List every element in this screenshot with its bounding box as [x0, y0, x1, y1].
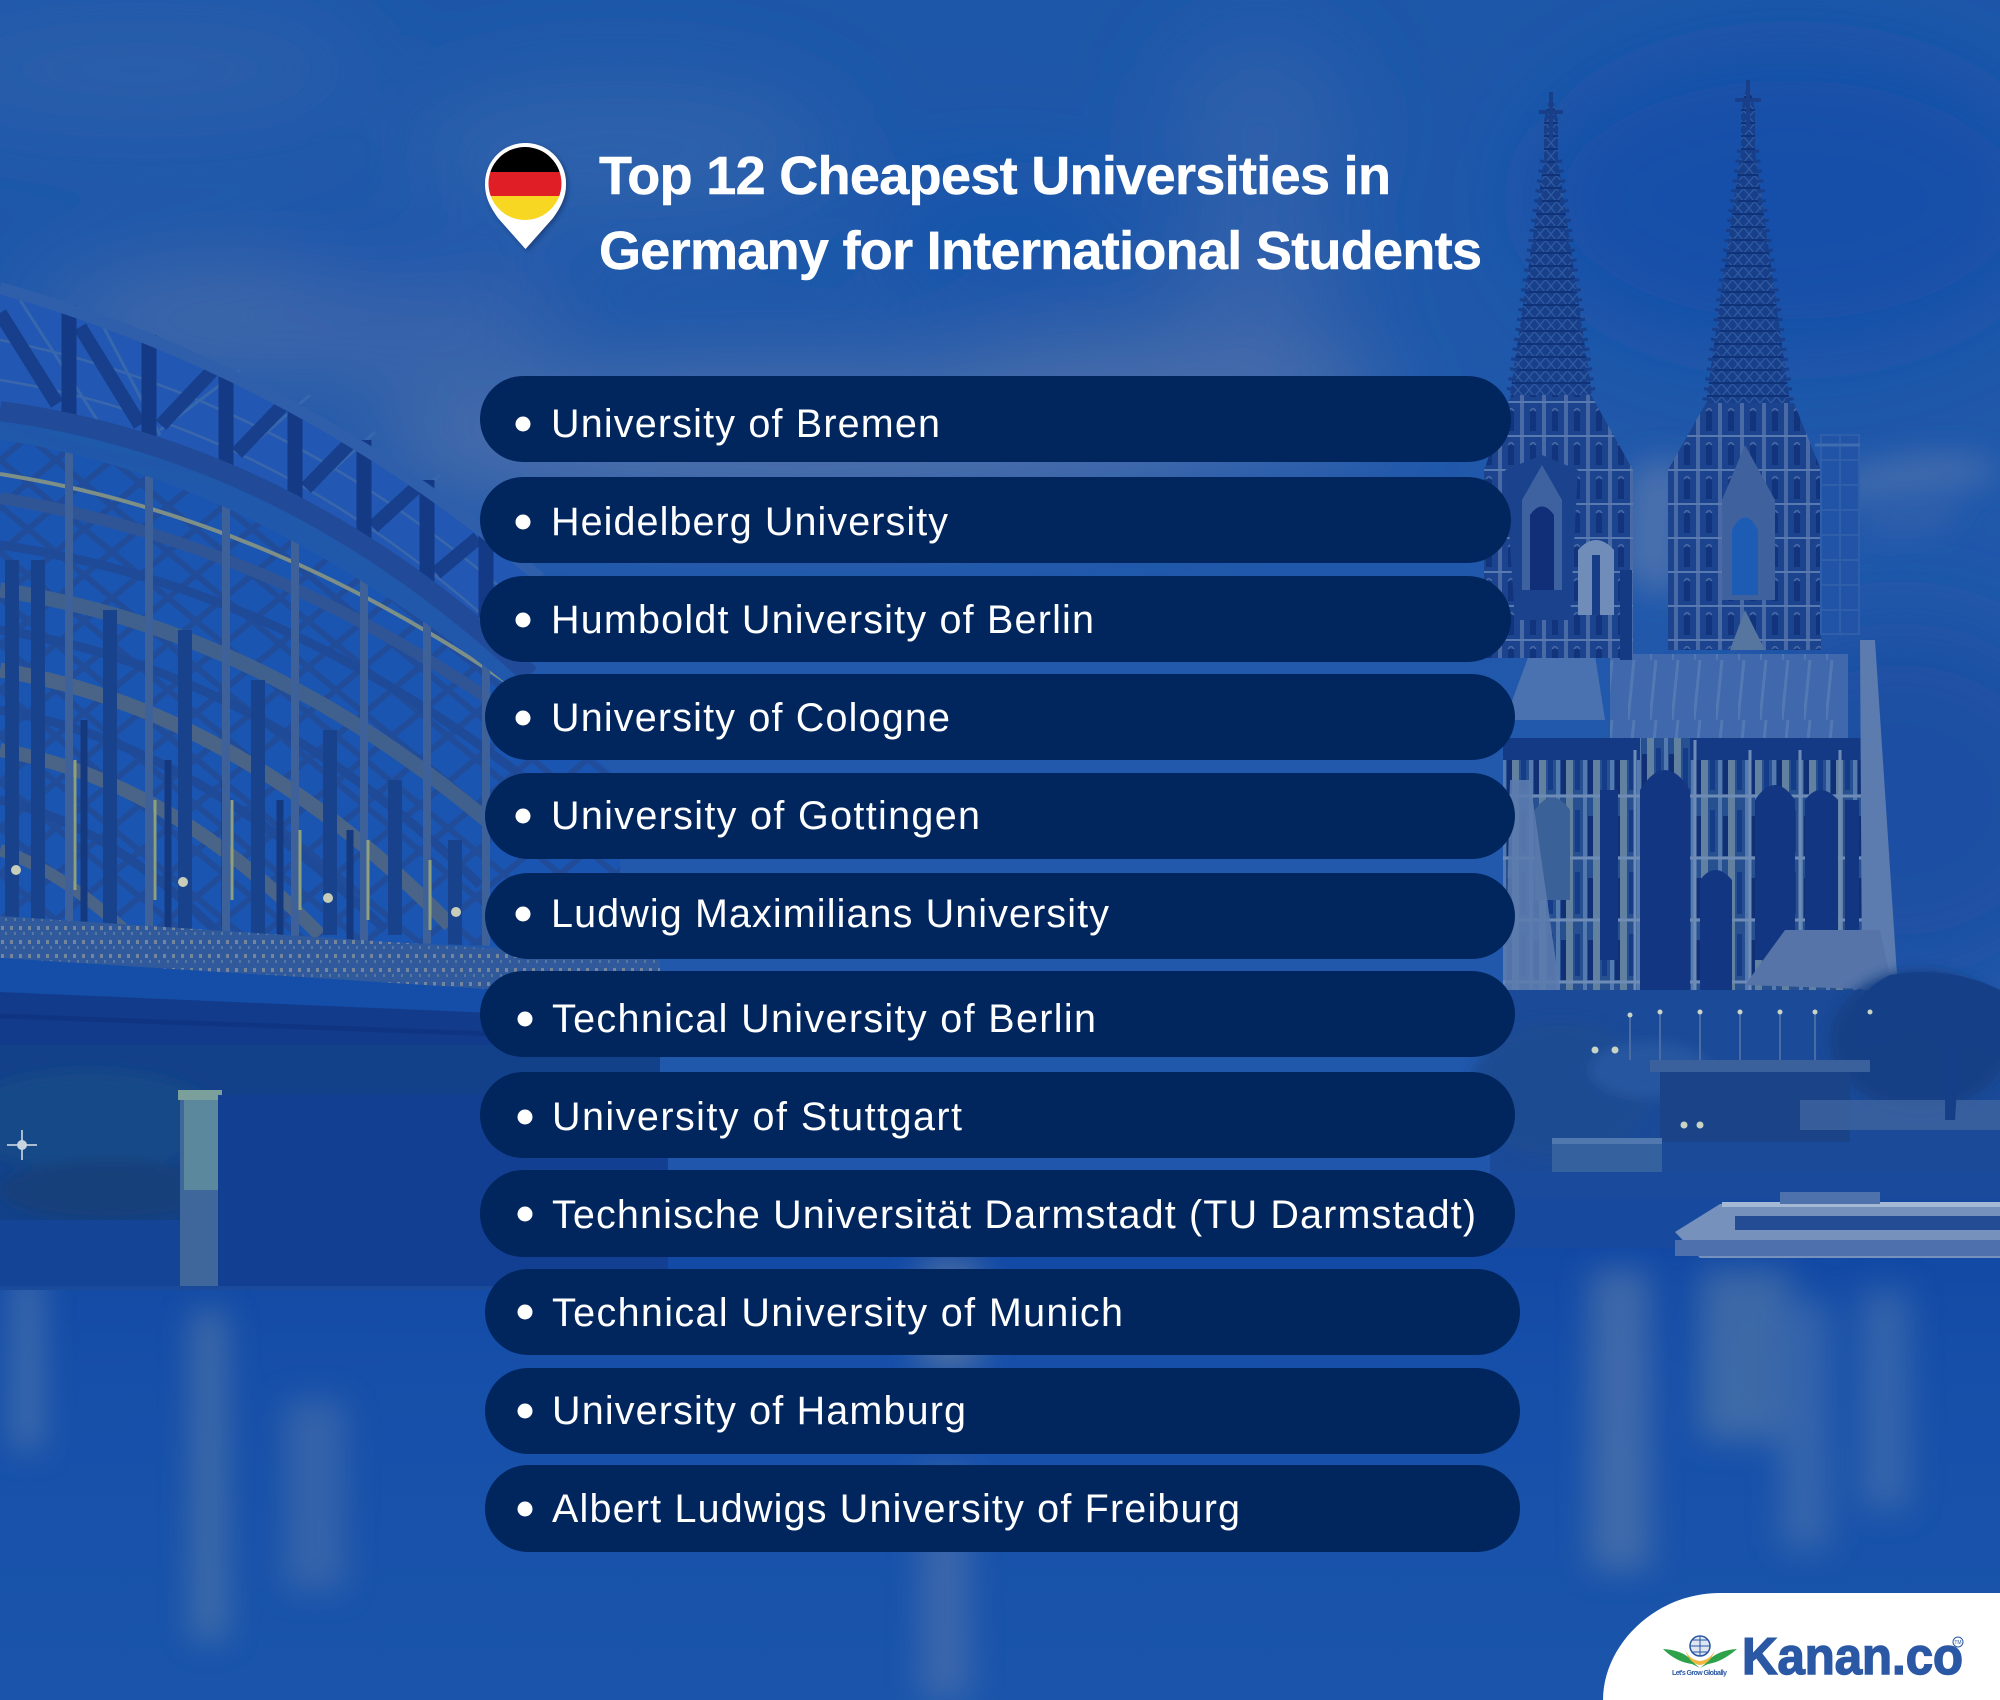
cathedral: pavilion on the bank	[1552, 1138, 1662, 1174]
background photo: river water	[0, 1230, 2000, 1700]
bridge: inner bracing	[0, 415, 640, 950]
icon: German flag location pin	[485, 143, 567, 249]
cathedral: embankment and lamps	[1490, 990, 2000, 1180]
list item 5	[485, 773, 1515, 859]
background photo: Hohenzollern bridge	[0, 285, 680, 1290]
title: Germany for International Students	[599, 221, 1482, 281]
cathedral: scaffold	[1821, 435, 1859, 634]
list item 4: University of Cologne	[551, 696, 950, 740]
title	[599, 146, 1482, 281]
cathedral: nave base	[1503, 738, 1894, 993]
logo: Kanan.co corner badge	[1603, 1593, 2000, 1700]
background photo: Cologne Cathedral	[1470, 80, 2000, 1258]
logo: wordmark: Kanan.co	[1742, 1628, 1963, 1686]
list item 9	[480, 1170, 1515, 1257]
bridge: riverbank trees	[0, 1045, 660, 1245]
list item 8	[480, 1072, 1515, 1158]
bridge: stone pier	[180, 1095, 220, 1290]
list item 4	[485, 674, 1515, 760]
list item 3: Humboldt University of Berlin	[551, 598, 1094, 642]
list item 7	[480, 971, 1515, 1057]
list of universities	[480, 376, 1520, 1552]
list item 7: Technical University of Berlin	[552, 997, 1096, 1041]
list item 12: Albert Ludwigs University of Freiburg	[552, 1487, 1240, 1531]
list item 10: Technical University of Munich	[552, 1291, 1123, 1335]
logo: trademark	[1953, 1637, 1963, 1647]
list item 6	[485, 873, 1515, 959]
list item 2	[480, 477, 1511, 563]
logo: trademark: TM	[1954, 1640, 1962, 1646]
logo: globe and wings	[1663, 1636, 1737, 1668]
list item 11: University of Hamburg	[552, 1389, 966, 1433]
list item 12	[485, 1465, 1520, 1552]
cathedral: river boat	[1675, 1204, 2000, 1258]
list item 9: Technische Universität Darmstadt (TU Darmstadt)	[552, 1193, 1476, 1237]
list item 5: University of Gottingen	[551, 794, 980, 838]
list item 6: Ludwig Maximilians University	[551, 892, 1109, 936]
list item 2: Heidelberg University	[551, 500, 948, 544]
bridge: opening behind the arch	[0, 440, 620, 950]
cathedral: buttress and small spires	[1505, 640, 1898, 990]
list item 8: University of Stuttgart	[552, 1095, 962, 1139]
cathedral: right tower	[1668, 403, 1821, 650]
list item 10	[485, 1269, 1520, 1355]
title: Top 12 Cheapest Universities in	[599, 146, 1391, 206]
bridge: top truss	[0, 285, 540, 675]
bridge: railing and deck	[0, 916, 660, 1000]
list item 3	[480, 576, 1511, 662]
cathedral: nave roof	[1610, 654, 1848, 738]
logo: tagline: Let's Grow Globally	[1672, 1670, 1727, 1677]
list item 11	[485, 1368, 1520, 1454]
cathedral: right spire	[1706, 80, 1790, 403]
list item 1: University of Bremen	[551, 402, 940, 446]
cathedral: left tower	[1484, 395, 1633, 658]
cathedral: left spire	[1510, 92, 1592, 395]
list item 1	[480, 376, 1511, 462]
